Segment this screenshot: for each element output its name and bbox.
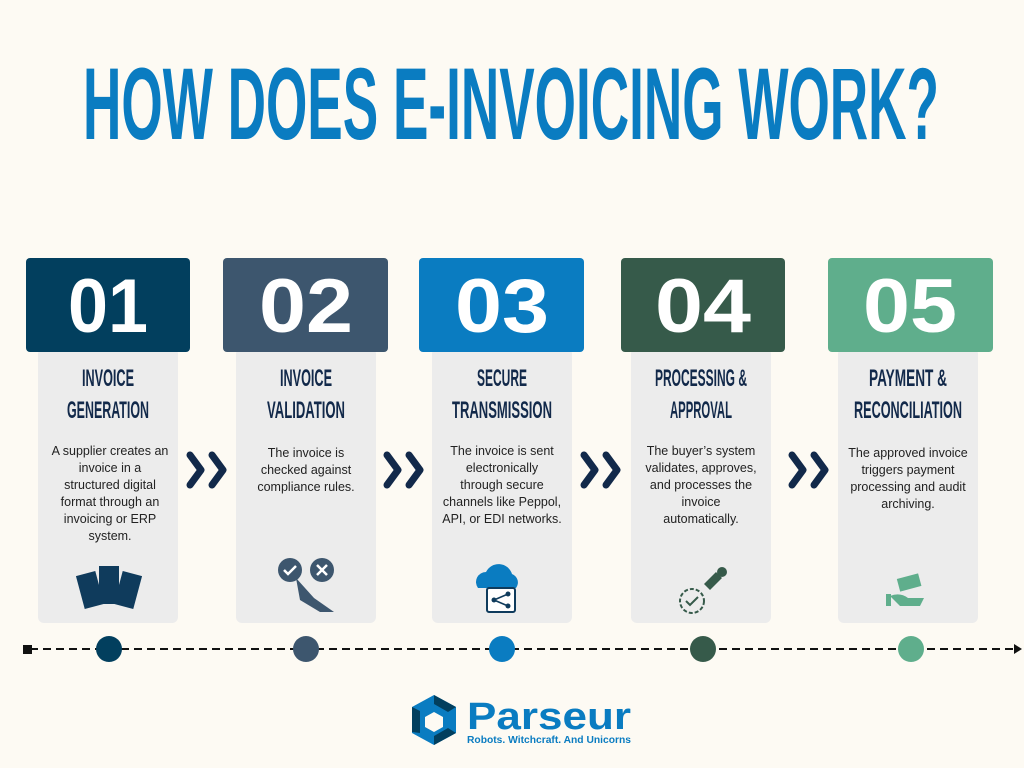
body 1: structured digital [64, 478, 156, 492]
body 5 [848, 446, 968, 511]
step 3 [419, 258, 584, 623]
body 2: compliance rules. [257, 480, 355, 494]
body 4: invoice [682, 495, 720, 509]
heading 2: INVOICE [280, 365, 332, 392]
step 4 [621, 258, 785, 623]
body 1: invoice in a [79, 461, 141, 475]
body 1: system. [88, 529, 132, 543]
body 2: checked against [261, 463, 352, 477]
heading 3: TRANSMISSION [452, 397, 552, 424]
heading 1: INVOICE [82, 365, 134, 392]
step 1 [26, 258, 190, 623]
icon: stamp [680, 567, 727, 613]
body 1: invoicing or ERP [64, 512, 156, 526]
heading 1 [67, 365, 149, 424]
heading 3: SECURE [477, 365, 527, 392]
number box 03 [419, 258, 584, 352]
number box 04: 04 [655, 264, 751, 349]
number box 02: 02 [259, 264, 353, 349]
body 4: automatically. [663, 512, 739, 526]
icon: money hand [886, 573, 924, 606]
step 4: PROCESSING & [655, 365, 747, 392]
heading 4 [655, 365, 747, 424]
body 5: triggers payment [861, 463, 955, 477]
logo: Parseur: Parseur [467, 696, 631, 738]
number box 05: 05 [863, 264, 957, 349]
body 3: through secure [460, 478, 544, 492]
logo: Parseur: Robots. Witchcraft. And Unicorns [467, 735, 631, 746]
number box 01 [26, 258, 190, 352]
chevron 2 [387, 455, 420, 485]
heading 4: APPROVAL [670, 397, 732, 424]
icon: check and cross [278, 558, 334, 612]
body 4: and processes the [650, 478, 752, 492]
number box 05 [828, 258, 993, 352]
body 3: channels like Peppol, [443, 495, 561, 509]
number box 01: 01 [68, 264, 148, 349]
heading 2: VALIDATION [267, 397, 345, 424]
step 2 [223, 258, 388, 623]
heading 2 [267, 365, 345, 424]
body 4 [645, 444, 757, 526]
body 1: format through an [61, 495, 159, 509]
chevron 1 [190, 455, 223, 485]
body 1: A supplier creates an [52, 444, 168, 458]
number box 02 [223, 258, 388, 352]
body 3 [442, 444, 562, 526]
heading 5: PAYMENT & [869, 365, 947, 392]
body 2: The invoice is [268, 446, 344, 460]
icon: cloud lock [476, 564, 518, 612]
number box 03: 03 [455, 264, 549, 349]
chevron 4 [792, 455, 825, 485]
body 3: API, or EDI networks. [442, 512, 562, 526]
body 5: The approved invoice [848, 446, 968, 460]
heading 1: GENERATION [67, 397, 149, 424]
chevron 3 [584, 455, 617, 485]
logo: Parseur [412, 695, 631, 746]
body 4: validates, approves, [645, 461, 757, 475]
body 2 [257, 446, 355, 494]
body 5: archiving. [881, 497, 935, 511]
body 5: processing and audit [850, 480, 966, 494]
body 3: The invoice is sent [450, 444, 554, 458]
timeline [23, 636, 1022, 662]
body 1 [52, 444, 168, 543]
heading 3 [452, 365, 552, 424]
heading 5 [854, 365, 962, 424]
step 5 [828, 258, 993, 623]
icon: invoices [76, 566, 142, 609]
body 3: electronically [466, 461, 539, 475]
number box 04 [621, 258, 785, 352]
body 4: The buyer’s system [647, 444, 755, 458]
